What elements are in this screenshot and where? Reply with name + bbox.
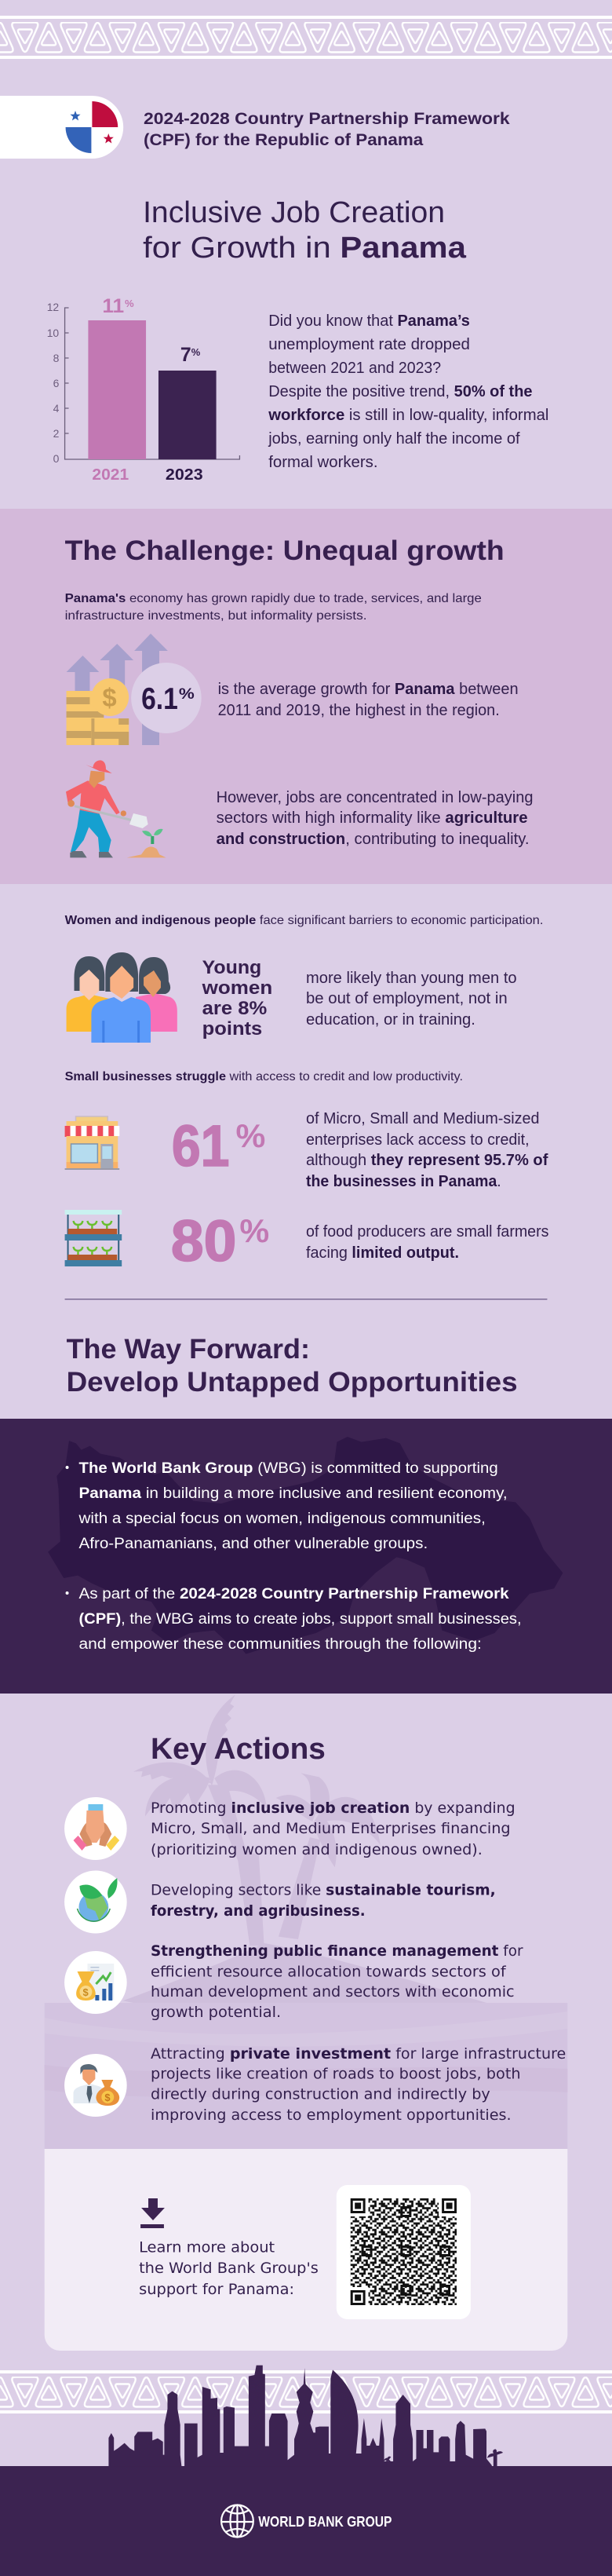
map of Panama watermark (48, 1437, 563, 1654)
text: food producers (306, 1223, 548, 1262)
text: more likely: education, or in training. (306, 1011, 475, 1029)
stat: 6.1%: % (179, 686, 195, 703)
bullet: WBG commitment: Panama in building a more inclusive and resilient economy, (78, 1485, 508, 1502)
text: economy intro (65, 592, 482, 623)
icon: investor with money bag: $ (104, 2092, 111, 2103)
text (151, 1800, 515, 1858)
text: average growth (218, 681, 519, 719)
text: improving access to employment opportunities. (151, 2107, 512, 2124)
value 11%: 11 (102, 295, 124, 317)
stat: 80%: 80 (171, 1208, 236, 1273)
text: Promoting inclusive job creation by expanding (151, 1800, 515, 1817)
stat: young women 8% points: are 8% (202, 998, 267, 1019)
stat: 80%: % (239, 1212, 269, 1249)
intro paragraph: unemployment rate dropped (268, 336, 470, 353)
stat: 61%: % (235, 1117, 265, 1154)
intro paragraph: jobs, earning only half the income of (268, 430, 520, 448)
Panama City skyline silhouette (108, 2366, 503, 2467)
intro paragraph: Did you know that Panama’s (268, 312, 470, 330)
year labels: 2023 (166, 466, 203, 484)
bar chart: unemployment rate 2021 vs 2023: 2 (53, 427, 60, 440)
bullet: WBG commitment (66, 1460, 508, 1552)
text: MSME credit: although they represent 95.7% of (306, 1152, 548, 1169)
bar chart: unemployment rate 2021 vs 2023: 8 (53, 352, 60, 364)
action: inclusive job creation (64, 1797, 515, 1860)
text: (prioritizing women and indigenous owned). (151, 1842, 483, 1858)
text: learn more: the World Bank Group's (139, 2260, 319, 2277)
stat: 80% (171, 1208, 269, 1273)
intro paragraph: formal workers. (268, 454, 378, 471)
bullet: CPF aims: (CPF), the WBG aims to create jobs, support small businesses, (78, 1610, 522, 1628)
text: Micro, Small, and Medium Enterprises financing (151, 1821, 511, 1837)
icon: growth arrows and coins (67, 634, 168, 745)
bullet: CPF aims: As part of the 2024-2028 Country Partnership Framework (78, 1585, 509, 1602)
main title: for Growth in Panama (143, 232, 467, 265)
panel: World Bank Group commitment (0, 1419, 612, 1694)
panel: learn more card (45, 2149, 567, 2351)
icon: download arrow (140, 2198, 165, 2228)
text: economy intro: Panama's economy has grown rapidly due to trade, services, and large (65, 592, 482, 605)
stat: 6.1% (131, 663, 202, 733)
bar chart: unemployment rate 2021 vs 2023 (47, 295, 239, 484)
main title: Inclusive Job Creation (143, 196, 445, 229)
text: more likely (306, 970, 517, 1029)
intro paragraph: between 2021 and 2023? (268, 360, 441, 377)
text: MSME credit (306, 1110, 548, 1190)
stat: young women 8% points: Young (202, 957, 261, 978)
text (151, 1882, 496, 1920)
water waves background (45, 2003, 567, 2149)
heading: the way forward: Develop Untapped Opportunities (67, 1367, 518, 1398)
stat: 61% (172, 1113, 265, 1178)
text: MSME credit: the businesses in Panama. (306, 1173, 501, 1190)
text: Attracting private investment for large infrastructure (151, 2046, 566, 2063)
bar chart: unemployment rate 2021 vs 2023: 4 (53, 402, 60, 415)
text: human development and sectors with economic (151, 1984, 515, 2001)
icon: globe with leaves (64, 1870, 127, 1933)
icon: joined hands (64, 1797, 127, 1860)
action: sustainable sectors (64, 1870, 496, 1933)
bottom decorative pattern band (0, 2370, 612, 2413)
text: Strengthening public finance management for (151, 1943, 523, 1960)
intro paragraph: Despite the positive trend, 50% of the (268, 383, 533, 400)
text: food producers: of food producers are small farmers (306, 1223, 548, 1240)
bar chart: unemployment rate 2021 vs 2023: 12 (47, 301, 59, 313)
text: food producers: facing limited output. (306, 1244, 459, 1262)
text: MSME credit: enterprises lack access to credit, (306, 1131, 530, 1149)
icon: farmer with shovel (66, 760, 166, 857)
text: learn more: Learn more about (139, 2239, 275, 2256)
icon: investor with money bag (64, 2054, 127, 2117)
footer panel (0, 2366, 612, 2576)
framework title text: 2024-2028 Country Partnership Framework (144, 110, 510, 128)
value 11% (102, 295, 134, 317)
intro paragraph: workforce is still in low-quality, informal (268, 407, 548, 424)
value 7%: 7 (180, 344, 191, 366)
value 7%: % (191, 346, 201, 358)
bullet: WBG commitment: The World Bank Group (WBG) is committed to supporting (78, 1460, 498, 1477)
text: forestry, and agribusiness. (151, 1903, 366, 1920)
text: low-paying sectors: sectors with high informality like agriculture (217, 809, 528, 827)
text: learn more: support for Panama: (139, 2282, 294, 2298)
stat: 6.1%: 6.1 (141, 682, 178, 716)
text: average growth: 2011 and 2019, the highest in the region. (218, 702, 500, 719)
text: low-paying sectors: However, jobs are concentrated in low-paying (217, 789, 534, 806)
text: projects like creation of roads to boost jobs, both (151, 2066, 521, 2083)
text: more likely: more likely than young men to (306, 970, 517, 987)
text: average growth: is the average growth for Panama between (218, 681, 519, 698)
text (151, 1943, 523, 2021)
value 11%: % (125, 298, 134, 309)
bar 2023 (158, 371, 217, 459)
text: women and indigenous people: Women and indigenous people face significant barriers to economic participation. (65, 914, 543, 927)
header: flag and framework title (0, 96, 510, 159)
palm trees and island watermark (123, 1694, 497, 2014)
bar chart: unemployment rate 2021 vs 2023: 10 (47, 327, 59, 339)
text: MSME credit: of Micro, Small and Medium-sized (306, 1110, 539, 1127)
icon: growth arrows and coins: $ (102, 683, 117, 712)
bar chart: unemployment rate 2021 vs 2023: 0 (53, 452, 60, 465)
intro paragraph (268, 312, 548, 471)
stat: young women 8% points: points (202, 1018, 262, 1040)
framework title text: (CPF) for the Republic of Panama (144, 131, 424, 149)
stat: 61%: 61 (172, 1113, 230, 1178)
bullet: CPF aims: and empower these communities through the following: (78, 1635, 482, 1653)
main title (143, 196, 467, 265)
icon: money bag and chart: $ (82, 1986, 89, 1998)
text (151, 2046, 566, 2124)
heading: the way forward: The Way Forward: (67, 1334, 310, 1365)
icon: money bag and chart (64, 1951, 127, 2014)
stat: young women 8% points (202, 957, 272, 1040)
year labels (92, 466, 203, 484)
framework title text (144, 110, 510, 149)
heading: key actions: Key Actions (151, 1733, 326, 1766)
bullet: CPF aims (66, 1585, 522, 1653)
text: more likely: be out of employment, not in (306, 990, 508, 1007)
icon: shop (65, 1116, 119, 1170)
icon: Panama flag on white pill (0, 96, 123, 159)
World Bank Group logo: WORLD BANK GROUP (258, 2513, 392, 2530)
top decorative pattern band (0, 16, 612, 59)
year labels: 2021 (92, 466, 129, 484)
World Bank Group logo (221, 2505, 392, 2538)
icon: greenhouse shelves (65, 1210, 122, 1266)
QR code (337, 2185, 471, 2319)
text: learn more (139, 2239, 319, 2298)
text: small businesses struggle: Small businesses struggle with access to credit and low productivity. (65, 1070, 463, 1083)
text: low-paying sectors: and construction, contributing to inequality. (217, 831, 530, 848)
text: economy intro: infrastructure investments, but informality persists. (65, 609, 367, 623)
value 7% (180, 344, 201, 366)
text: directly during construction and indirectly by (151, 2086, 490, 2103)
heading: the way forward (67, 1334, 518, 1398)
text: growth potential. (151, 2004, 281, 2021)
panel: the challenge (0, 509, 612, 884)
action: private investment (64, 2046, 566, 2124)
heading: the challenge: The Challenge: Unequal growth (65, 535, 505, 566)
bar 2021 (88, 320, 146, 459)
icon: three women (67, 952, 177, 1043)
bullet: WBG commitment: Afro-Panamanians, and other vulnerable groups. (78, 1535, 428, 1552)
bar chart: unemployment rate 2021 vs 2023: 6 (53, 377, 60, 389)
text: Developing sectors like sustainable tourism, (151, 1882, 496, 1899)
bullet: WBG commitment: with a special focus on women, indigenous communities, (78, 1510, 486, 1527)
text: low-paying sectors (217, 789, 534, 848)
action: public finance management (64, 1943, 523, 2021)
stat: young women 8% points: women (202, 977, 272, 999)
text: efficient resource allocation towards sectors of (151, 1964, 506, 1981)
